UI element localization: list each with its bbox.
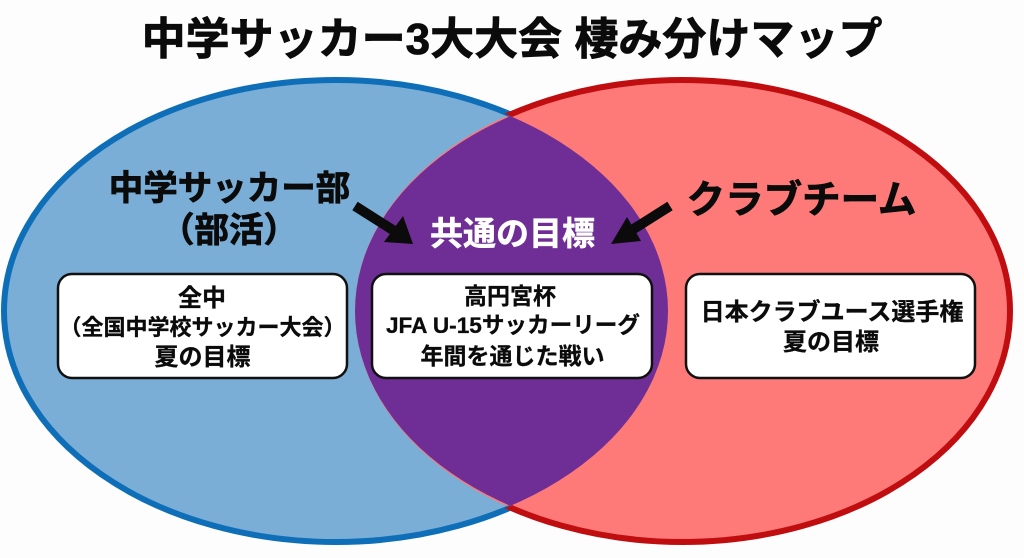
heading: school clubs (109, 170, 350, 250)
heading: club teams: クラブチーム (687, 178, 916, 222)
title: 中学サッカー3大大会 棲み分けマップ (142, 15, 882, 64)
heading: school clubs: 中学サッカー部 (109, 170, 350, 208)
panel: school tournament (58, 274, 347, 378)
arrow: left to centre (355, 206, 413, 244)
panel: club tournament: 夏の目標 (783, 329, 879, 356)
panel: shared tournament: 年間を通じた戦い (420, 343, 604, 369)
overlap: shared goal (355, 116, 668, 506)
panel: school tournament: 全中 (178, 285, 226, 312)
outline: club teams (504, 77, 1013, 545)
heading: shared goal: 共通の目標 (430, 215, 595, 252)
circle: club teams (355, 80, 1010, 542)
panel: club tournament: 日本クラブユース選手権 (701, 298, 963, 326)
panel: shared tournament (372, 274, 652, 378)
panel: club tournament (686, 274, 975, 378)
heading: school clubs: （部活） (160, 212, 298, 250)
circle: school clubs (4, 80, 668, 542)
panel: shared tournament: JFA U-15サッカーリーグ (386, 312, 640, 338)
panel: school tournament: （全国中学校サッカー大会） (59, 315, 346, 340)
arrow: right to centre (611, 206, 670, 244)
panel: shared tournament: 高円宮杯 (464, 283, 556, 309)
panel: school tournament: 夏の目標 (154, 344, 250, 371)
outline: school clubs (1, 77, 511, 545)
